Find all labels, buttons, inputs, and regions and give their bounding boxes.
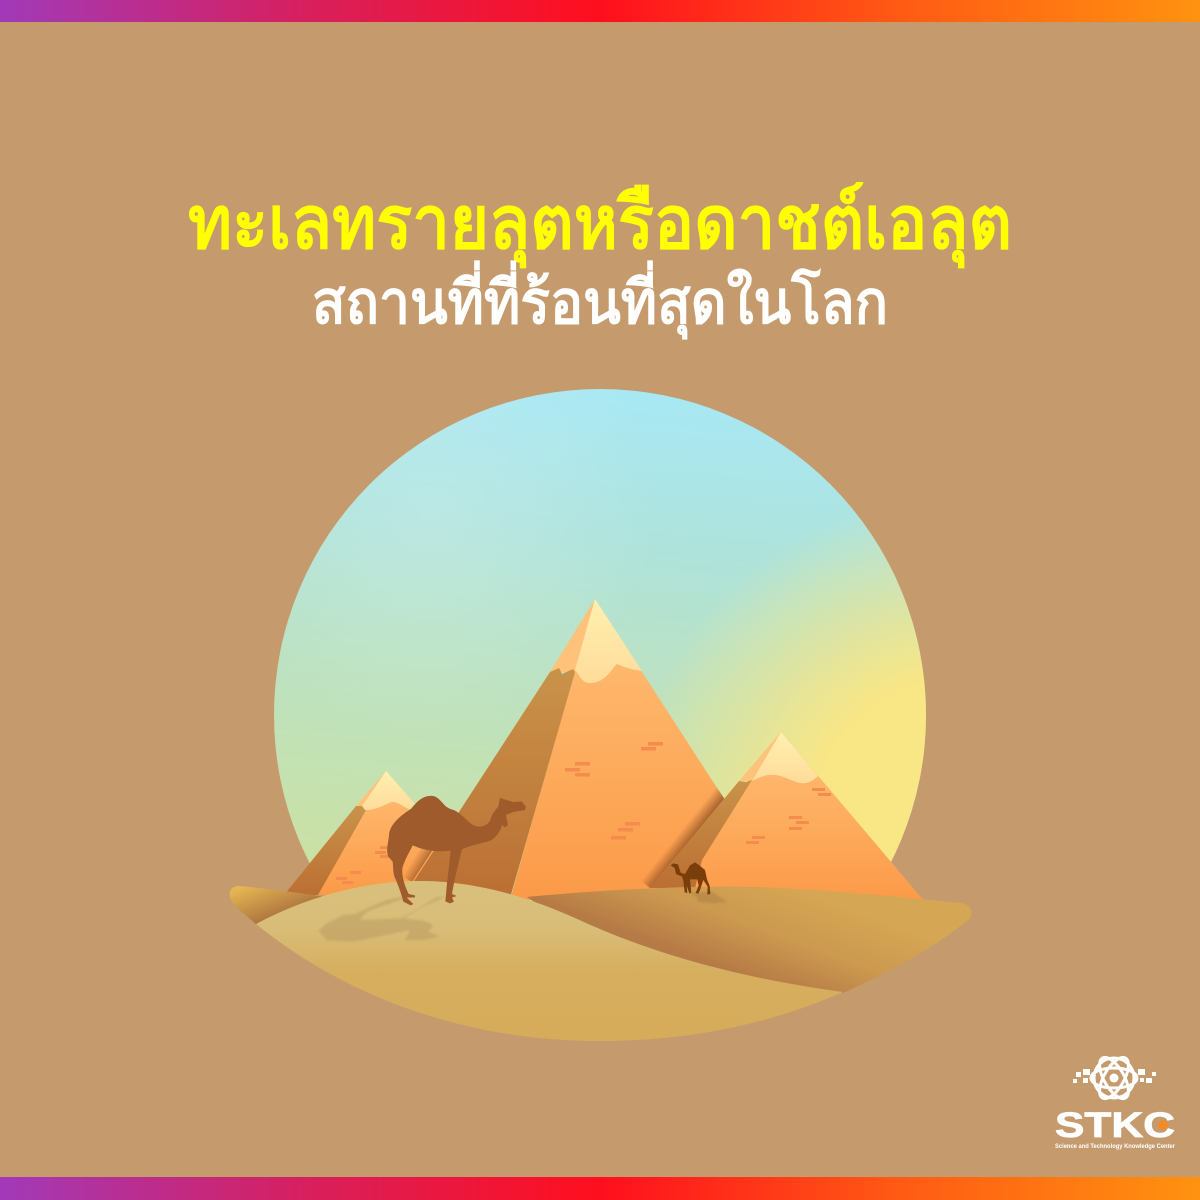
bottom gradient bar — [0, 1177, 1200, 1200]
left dune — [230, 886, 325, 925]
desert illustration — [230, 389, 972, 1041]
dots — [1073, 1069, 1156, 1083]
atom emblem — [1091, 1053, 1137, 1103]
right pyramid — [650, 732, 925, 902]
top gradient bar — [0, 0, 1200, 22]
front dune — [256, 881, 843, 1041]
bricks — [336, 846, 391, 884]
small camel — [671, 862, 710, 895]
title: ทะเลทรายลุตหรือดาชต์เอลุต — [188, 181, 1012, 269]
bricks — [746, 788, 831, 844]
STKC logo — [1055, 1053, 1176, 1150]
large camel shadow — [318, 896, 447, 942]
left pyramid — [284, 771, 450, 895]
main pyramid — [414, 599, 724, 900]
large camel — [387, 796, 526, 905]
right dune — [527, 887, 972, 993]
bricks — [565, 742, 663, 840]
atom core — [1110, 1074, 1118, 1082]
logo tagline: Science and Technology Knowledge Center — [1055, 1144, 1176, 1150]
small camel shadow — [690, 892, 727, 903]
logo dot — [1158, 1120, 1168, 1130]
sky circle — [274, 389, 926, 1041]
wordmark: STKC — [1055, 1106, 1175, 1145]
subtitle: สถานที่ที่ร้อนที่สุดในโลก — [312, 260, 888, 340]
